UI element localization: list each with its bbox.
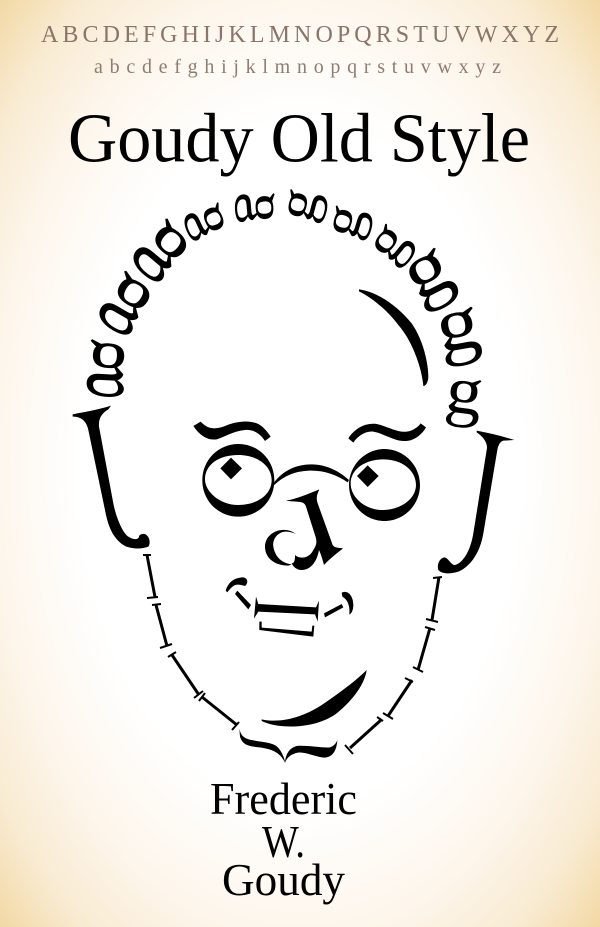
left cheek curl	[226, 577, 247, 592]
left eyebrow	[193, 421, 271, 441]
jaw right	[345, 577, 442, 754]
left glasses lens	[202, 444, 274, 517]
uppercase alphabet: ABCDEFGHIJKLMNOPQRSTUVWXYZ	[41, 22, 559, 48]
nose stem	[286, 489, 343, 570]
nose curve	[265, 530, 296, 566]
name: W.: W.	[262, 817, 305, 867]
right mouth dash	[324, 604, 343, 617]
right sideburn	[438, 431, 514, 573]
jaw left	[143, 555, 239, 730]
hair g 4: g	[351, 208, 421, 273]
title: Goudy Old Style	[68, 100, 530, 178]
lower teeth	[259, 622, 314, 637]
left pupil	[220, 458, 242, 479]
hair g 2: g	[428, 277, 486, 369]
left sideburn	[73, 406, 150, 548]
hair g 3: g	[386, 219, 465, 318]
hair made of letter g	[84, 181, 488, 430]
hair g 7: g	[233, 189, 298, 225]
chin brace	[239, 728, 337, 763]
right glasses lens	[349, 449, 420, 521]
chin and smile	[239, 670, 367, 763]
smile	[262, 670, 367, 727]
hair g 10: g	[92, 243, 175, 341]
hair g 8: g	[180, 191, 250, 245]
right eyebrow	[348, 423, 426, 443]
forehead crease	[359, 289, 428, 386]
hair g 6: g	[262, 181, 331, 227]
hair g 9: g	[126, 193, 216, 289]
hair g 1: g	[442, 352, 488, 430]
glasses bridge	[273, 464, 349, 485]
right cheek curl	[342, 592, 353, 615]
right pupil	[357, 465, 379, 487]
upper teeth	[254, 597, 319, 622]
name: Goudy: Goudy	[222, 855, 345, 905]
lowercase alphabet: abcdefghijklmnopqrstuvwxyz	[94, 56, 501, 78]
left mouth dash	[235, 591, 251, 609]
hair g 5: g	[307, 196, 376, 245]
face features	[193, 421, 426, 637]
name: Frederic: Frederic	[210, 774, 357, 824]
hair g 11: g	[84, 310, 132, 398]
